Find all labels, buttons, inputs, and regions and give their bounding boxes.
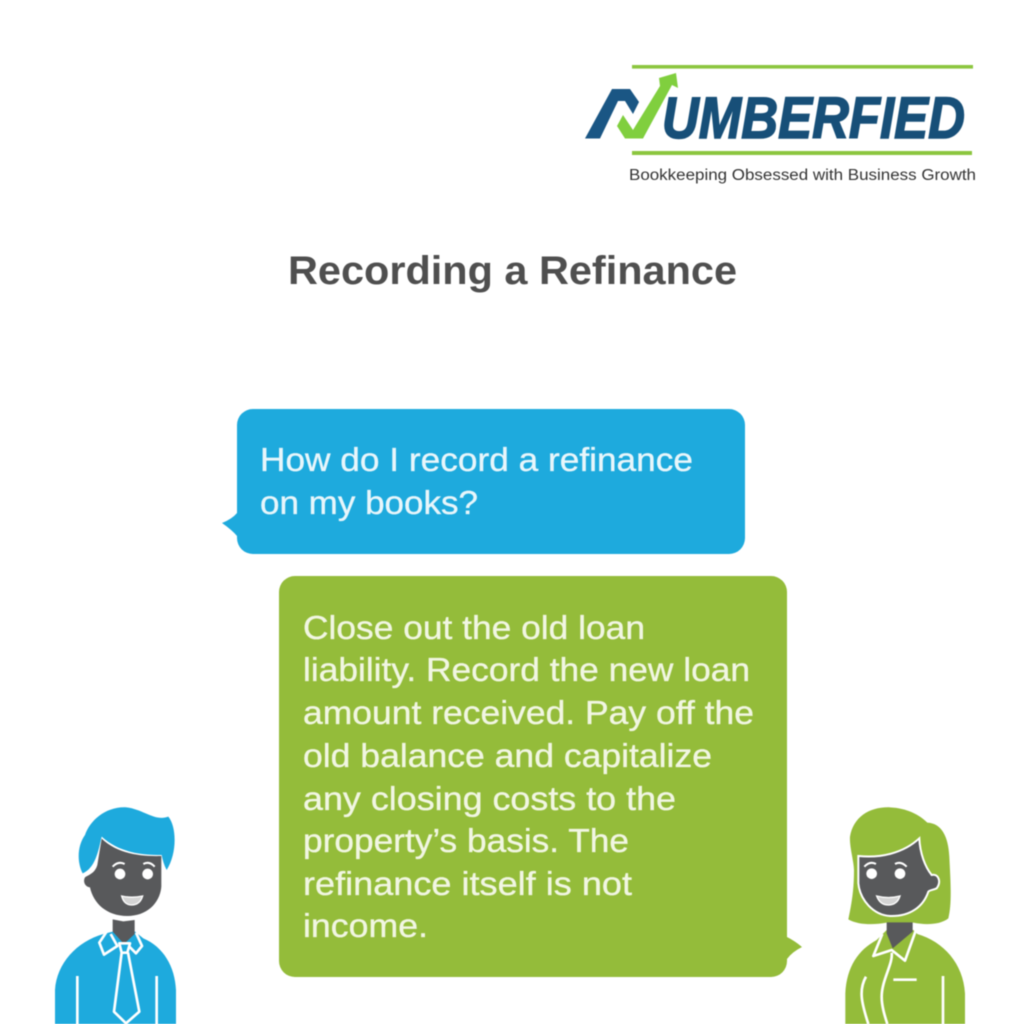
speech bubble: answer xyxy=(279,576,802,977)
logo: Numberfied xyxy=(585,65,976,184)
answer text: refinance itself is not xyxy=(303,865,632,902)
question text: How do I record a refinance xyxy=(260,441,693,478)
icon: logo growth arrow xyxy=(617,73,678,138)
character: woman in green xyxy=(845,807,965,1024)
logo tagline: Bookkeeping Obsessed with Business Growth xyxy=(629,167,976,184)
answer text: Close out the old loan xyxy=(303,609,645,646)
answer text: old balance and capitalize xyxy=(303,737,712,774)
logo wordmark: UMBERFIED xyxy=(662,86,965,151)
answer text: amount received. Pay off the xyxy=(303,694,754,731)
answer text: income. xyxy=(303,907,428,944)
answer text: liability. Record the new loan xyxy=(303,651,750,688)
title: Recording a Refinance xyxy=(288,249,737,293)
speech bubble: question xyxy=(222,409,745,554)
character: man in blue xyxy=(55,807,176,1024)
question text: on my books? xyxy=(260,484,478,521)
answer text: any closing costs to the xyxy=(303,780,676,817)
answer text: property’s basis. The xyxy=(303,822,629,859)
icon: logo N mark blue stroke xyxy=(585,89,639,138)
